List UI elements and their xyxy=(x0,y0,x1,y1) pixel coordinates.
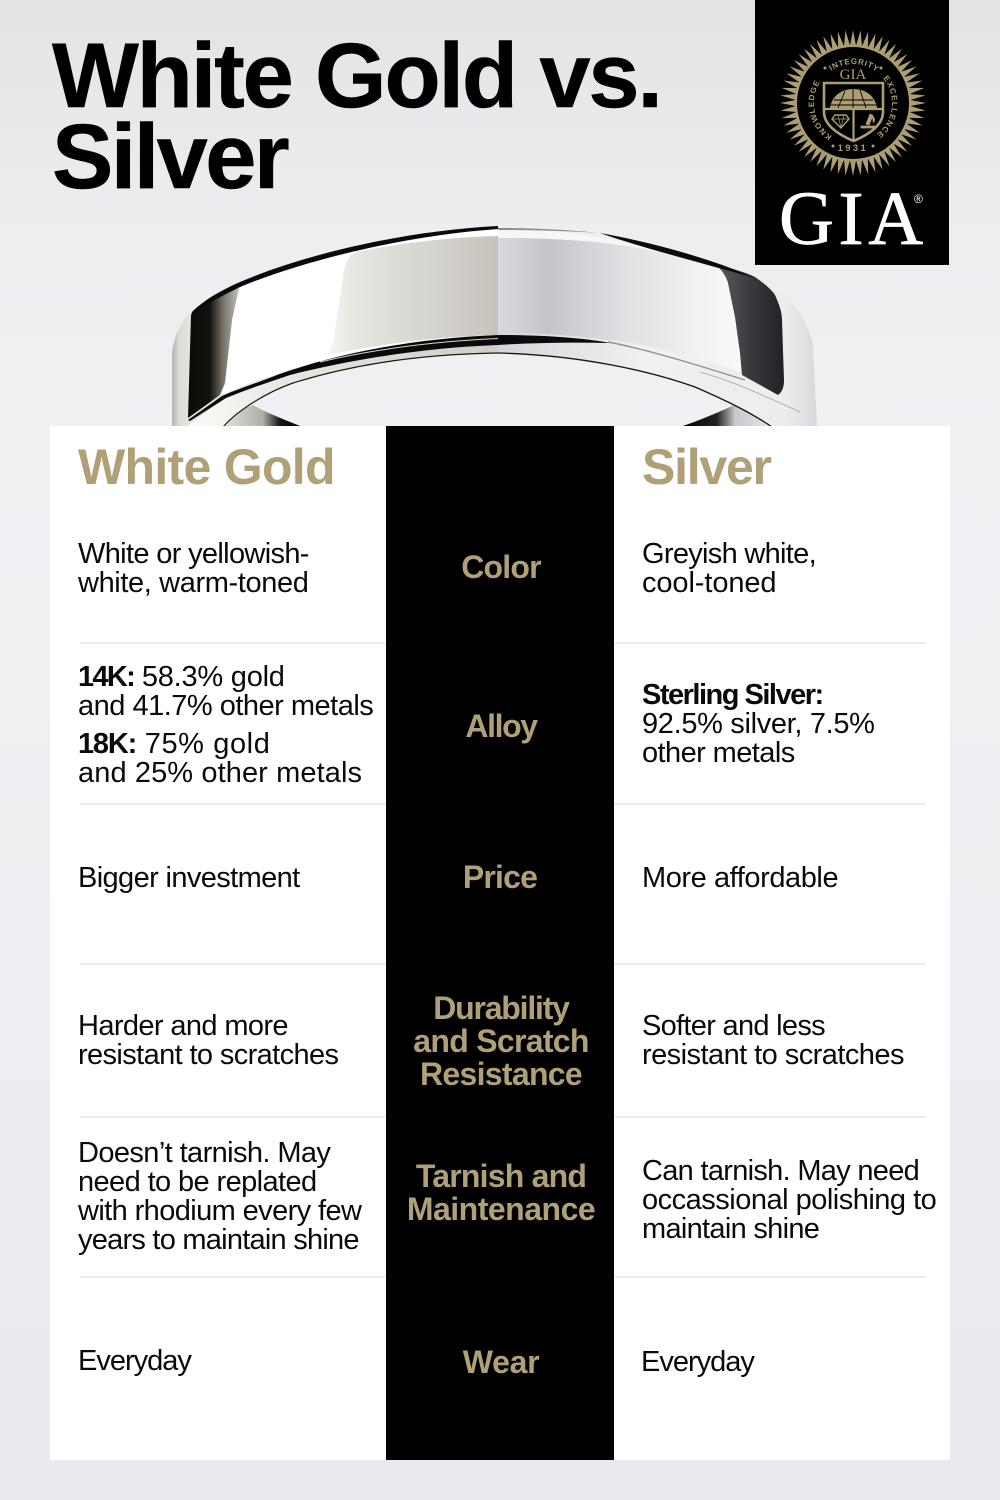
icon: seal: KNOWLEDGE xyxy=(808,80,832,140)
text: white gold 14K alloy: and 41.7% other metals xyxy=(78,690,373,722)
text: white gold tarnish: Doesn’t tarnish. May xyxy=(78,1136,330,1168)
icon: seal: GIA xyxy=(840,67,866,83)
text: silver color: Greyish white, xyxy=(642,538,816,570)
label: Durability and Scratch Resistance: Durability xyxy=(433,990,569,1026)
text: white gold tarnish: with rhodium every few xyxy=(78,1194,361,1226)
text: silver price: More affordable xyxy=(642,862,838,894)
text: white gold tarnish xyxy=(78,1136,362,1256)
text: silver tarnish: occassional polishing to xyxy=(642,1184,936,1216)
label: Durability and Scratch Resistance: Resistance xyxy=(420,1056,582,1092)
text: white gold durability: resistant to scratches xyxy=(78,1038,338,1070)
text: white gold 18K alloy xyxy=(78,728,362,788)
text: white gold color xyxy=(78,538,309,598)
title: Silver xyxy=(52,106,287,208)
text: white gold tarnish: years to maintain shine xyxy=(78,1224,359,1256)
text: silver color xyxy=(642,538,816,598)
icon: seal: INTEGRITY xyxy=(828,58,880,70)
text: white gold 18K alloy: 18K: 75% gold xyxy=(78,728,270,760)
label: Price: Price xyxy=(463,859,537,895)
label: Alloy: Alloy xyxy=(465,708,537,744)
label: Durability and Scratch Resistance: and Scratch xyxy=(413,1023,589,1059)
title: White Gold vs. xyxy=(52,25,661,127)
text: white gold 14K alloy xyxy=(78,660,373,722)
panel: comparison table xyxy=(50,426,950,1460)
text: white gold tarnish: need to be replated xyxy=(78,1166,317,1198)
text: silver color: cool-toned xyxy=(642,566,776,598)
text: silver alloy: 92.5% silver, 7.5% xyxy=(642,708,875,740)
label: Tarnish and Maintenance xyxy=(407,1158,595,1227)
ring: inner back pieces xyxy=(223,403,772,427)
text: silver durability: Softer and less xyxy=(642,1010,825,1042)
logo wordmark: GIA xyxy=(779,177,928,261)
label: Tarnish and Maintenance: Maintenance xyxy=(407,1191,595,1227)
label: Wear: Wear xyxy=(463,1344,539,1380)
ring: white gold half xyxy=(172,226,498,427)
text: silver tarnish: maintain shine xyxy=(642,1212,819,1244)
panel: centre black column xyxy=(386,426,614,1460)
heading: Silver: Silver xyxy=(642,439,771,495)
text: silver durability xyxy=(642,1010,904,1070)
text: white gold durability xyxy=(78,1010,338,1070)
label: Color: Color xyxy=(461,549,541,585)
text: silver alloy: Sterling Silver: xyxy=(642,678,823,710)
label: Durability and Scratch Resistance xyxy=(413,990,589,1092)
text: white gold 18K alloy: and 25% other metals xyxy=(78,756,362,788)
title xyxy=(52,25,661,208)
ring: silver half xyxy=(498,228,817,427)
text: white gold wear: Everyday xyxy=(78,1344,191,1376)
text: silver tarnish xyxy=(642,1154,936,1244)
logo: GIA badge xyxy=(755,0,949,265)
text: white gold color: White or yellowish- xyxy=(78,538,309,570)
text: white gold price: Bigger investment xyxy=(78,862,300,894)
text: silver alloy xyxy=(642,678,875,768)
ring illustration xyxy=(172,226,817,426)
text: silver alloy: other metals xyxy=(642,736,795,768)
label: Tarnish and Maintenance: Tarnish and xyxy=(416,1158,586,1194)
logo: GIA badge: ® xyxy=(914,192,923,206)
icon: seal: 1931 xyxy=(838,143,868,153)
text: white gold durability: Harder and more xyxy=(78,1010,288,1042)
text: silver tarnish: Can tarnish. May need xyxy=(642,1154,919,1186)
icon: seal: EXCELLENCE xyxy=(877,75,898,138)
text: white gold 14K alloy: 14K: 58.3% gold xyxy=(78,660,285,692)
heading: White Gold: White Gold xyxy=(78,439,335,495)
text: silver durability: resistant to scratches xyxy=(642,1038,904,1070)
icon: shield xyxy=(824,83,883,141)
text: white gold color: white, warm-toned xyxy=(78,566,308,598)
icon: seal xyxy=(780,30,926,176)
text: silver wear: Everyday xyxy=(641,1346,754,1378)
